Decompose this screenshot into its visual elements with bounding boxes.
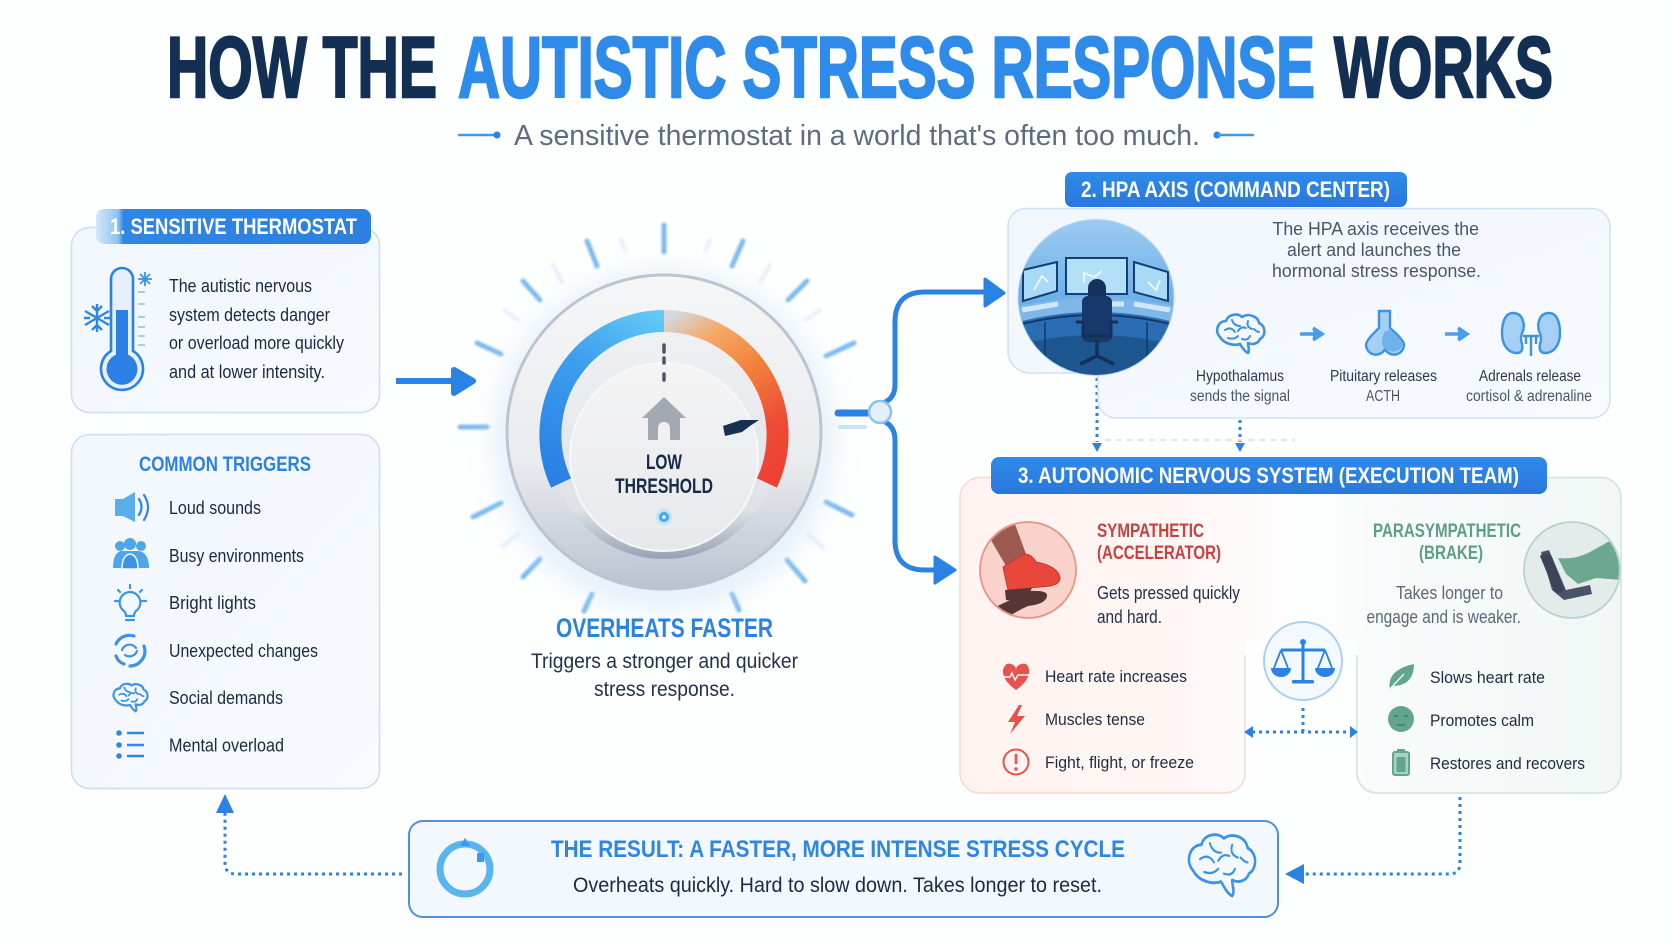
text: overheats faster: OVERHEATS FASTER [556,613,773,643]
dial lower ring [551,333,777,559]
text: HPA description: The HPA axis receives the [1272,219,1479,239]
title: HOW THE [167,20,437,116]
item: heart rate increases: Heart rate increases [1045,668,1187,686]
label: adrenals: cortisol & adrenaline [1466,388,1592,405]
badge: autonomic nervous system [991,457,1547,494]
item: restores and recovers [1393,749,1585,775]
label: pituitary: Pituitary releases [1330,368,1437,385]
icon: brain [1189,835,1255,896]
dial rays [460,225,854,611]
trigger: mental overload [116,730,284,759]
label: low threshold: LOW [646,451,682,474]
label: low threshold: THRESHOLD [615,475,713,498]
label: hypothalamus: Hypothalamus [1196,368,1284,385]
text: parasympathetic: (BRAKE) [1419,542,1483,564]
text: the result: Overheats quickly. Hard to slow down. Takes longer to reset. [573,874,1102,897]
panel: sympathetic background [960,478,1305,793]
item: muscles tense [1008,705,1145,734]
text: thermostat description: and at lower intensity. [169,361,325,382]
trigger: loud sounds [115,492,261,522]
icon: thermometer [84,268,152,390]
dial: thermostat [494,270,834,610]
illustration: control room [1018,219,1174,376]
item: fight flight or freeze [1004,750,1194,774]
item: promotes calm: Promotes calm [1430,712,1534,730]
text: the result: THE RESULT: A FASTER, MORE INTENSE STRESS CYCLE [551,836,1125,863]
trigger: bright lights: Bright lights [169,592,256,613]
item: heart rate increases [1003,664,1187,690]
heading: common triggers: COMMON TRIGGERS [139,452,311,476]
text: HPA description: alert and launches the [1287,240,1461,260]
text: thermostat description: or overload more quickly [169,332,345,353]
trigger: mental overload: Mental overload [169,734,284,756]
panel: common triggers [72,434,380,788]
item: slows heart rate [1388,664,1545,691]
trigger: busy environments: Busy environments [169,545,304,566]
text: sympathetic: SYMPATHETIC [1097,520,1204,542]
panel: common triggers: Social demands [169,687,283,708]
arrow: thermostat to dial [396,370,473,393]
dial outer disc [507,275,821,589]
item: muscles tense: Muscles tense [1045,711,1145,729]
arrow: branching connector [838,279,1004,583]
label: adrenals [1466,368,1592,405]
badge: HPA axis [1065,172,1407,207]
illustration: foot on accelerator [980,516,1076,624]
panel: autonomic nervous system [960,457,1622,793]
illustration: foot on brake [1524,522,1622,618]
text: HPA description [1272,219,1481,281]
text: the result [551,836,1125,897]
text: overheats faster: Triggers a stronger and quicker [531,650,798,673]
badge: autonomic nervous system: 3. AUTONOMIC NERVOUS SYSTEM (EXECUTION TEAM) [1018,463,1519,488]
panel: HPA axis [1008,172,1610,418]
arrow: result to triggers [216,794,402,874]
panel: the result [409,821,1278,917]
trigger: bright lights [115,585,256,620]
text: parasympathetic: PARASYMPATHETIC [1373,520,1521,542]
trigger: social demands [114,684,148,711]
text: sympathetic: (ACCELERATOR) [1097,542,1221,564]
label: adrenals: Adrenals release [1479,368,1581,385]
item: fight flight or freeze: Fight, flight, or freeze [1045,754,1194,772]
label: pituitary: ACTH [1366,388,1400,405]
text: thermostat description: system detects danger [169,304,330,325]
text: parasympathetic [1366,520,1521,627]
icon: house [642,397,686,440]
badge: sensitive thermostat [96,209,371,244]
text: sympathetic: and hard. [1097,607,1162,627]
arrow: parasympathetic to result [1285,797,1460,884]
icon: cycle [440,838,490,894]
text: sympathetic [1097,520,1240,627]
dial knob [570,363,758,551]
label: pituitary [1330,368,1437,405]
title: WORKS [1334,20,1553,116]
trigger: unexpected changes [116,635,318,666]
panel: parasympathetic background [1300,478,1621,793]
label: hypothalamus [1190,368,1290,405]
needle [723,420,759,436]
icon: balance scale [1264,622,1342,700]
text: parasympathetic: engage and is weaker. [1366,607,1521,627]
icon: brain [1217,315,1264,353]
subtitle: A sensitive thermostat in a world that's often too much. [514,120,1200,152]
text: HPA description: hormonal stress response. [1272,261,1481,281]
text: overheats faster: stress response. [594,678,735,701]
icon: kidneys [1502,313,1560,356]
text: thermostat description [169,275,345,382]
text: parasympathetic: Takes longer to [1396,583,1503,603]
dotted connectors: HPA to ANS [1092,378,1295,452]
badge: HPA axis: 2. HPA AXIS (COMMAND CENTER) [1081,177,1390,202]
item: promotes calm [1388,706,1534,732]
item: restores and recovers: Restores and recovers [1430,755,1585,773]
trigger: unexpected changes: Unexpected changes [169,640,318,661]
text: sympathetic: Gets pressed quickly [1097,583,1240,603]
arrow: hypothalamus to pituitary [1300,328,1322,340]
badge: sensitive thermostat: 1. SENSITIVE THERMOSTAT [110,214,357,239]
item: slows heart rate: Slows heart rate [1430,669,1545,687]
text: thermostat description: The autistic nervous [169,275,312,296]
trigger: loud sounds: Loud sounds [169,497,261,518]
indicator light [656,509,672,525]
gauge arc: hot [664,321,778,483]
trigger: busy environments [113,538,304,569]
panel: sensitive thermostat [72,209,380,412]
label: hypothalamus: sends the signal [1190,388,1290,405]
icon: pituitary [1366,311,1404,355]
label: low threshold [615,451,713,498]
arrow: pituitary to adrenals [1445,328,1467,340]
top tick marks [662,345,666,380]
dotted connector: balance [1244,708,1358,738]
gauge arc: cool [550,321,664,483]
text: overheats faster [531,613,798,701]
